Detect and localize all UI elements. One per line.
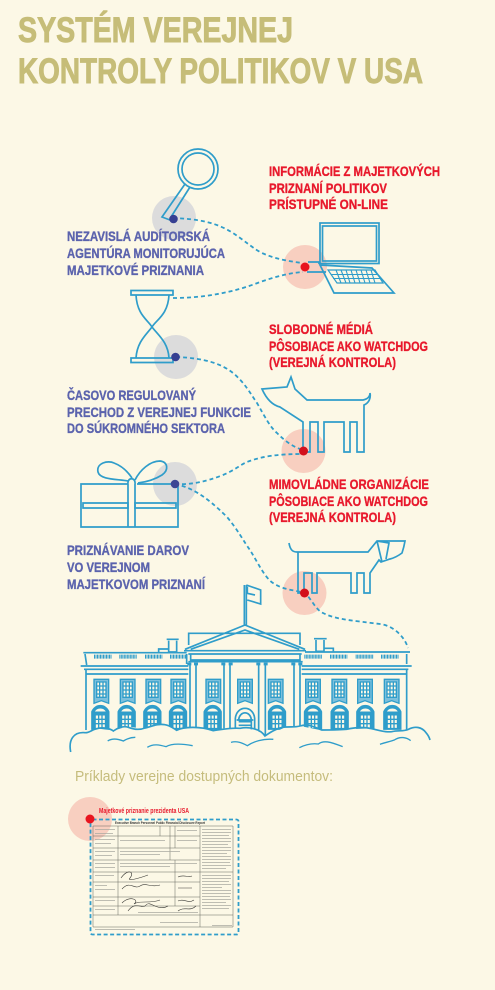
central door bbox=[235, 708, 255, 729]
text: regulated transition: ČASOVO REGULOVANÝ bbox=[67, 386, 197, 403]
icon: laptop bbox=[307, 223, 394, 293]
icon: hourglass bbox=[131, 290, 173, 362]
lower windows bbox=[92, 705, 109, 729]
clouds bbox=[70, 724, 430, 753]
icon: first dog bbox=[262, 377, 370, 452]
node: hourglass bbox=[171, 353, 180, 361]
text: declaring gifts: PRIZNÁVANIE DAROV bbox=[67, 542, 190, 558]
text: non-governmental organisations bbox=[269, 476, 429, 525]
text: regulated transition: PRECHOD Z VEREJNEJ FUNKCIE bbox=[67, 404, 251, 420]
left wing roof and balustrade bbox=[81, 653, 188, 730]
text: red on-line declarations: PRIZNANÍ POLITIKOV bbox=[269, 180, 388, 196]
text: free media: (VEREJNÁ KONTROLA) bbox=[269, 354, 396, 370]
text: non-governmental organisations: PÔSOBIACE AKO WATCHDOG bbox=[269, 492, 428, 509]
text: independent audit agency bbox=[67, 228, 225, 278]
connector: hourglass to laptop bbox=[173, 272, 303, 298]
right wing roof and balustrade bbox=[302, 652, 412, 730]
node: gift bbox=[171, 480, 179, 488]
node: first dog bbox=[299, 446, 308, 456]
connector: gift to first dog bbox=[175, 454, 302, 484]
connector: hourglass to first dog bbox=[176, 357, 300, 449]
icon: gift box bbox=[81, 461, 178, 527]
upper windows bbox=[94, 679, 109, 703]
caption: examples of documents: Príklady verejne dostupných dokumentov: bbox=[75, 769, 333, 785]
text: declaring gifts: VO VEREJNOM bbox=[67, 559, 150, 575]
text: free media: PÔSOBIACE AKO WATCHDOG bbox=[269, 337, 428, 354]
columns bbox=[190, 663, 300, 735]
text: free media bbox=[269, 321, 428, 370]
document example bbox=[68, 797, 238, 934]
column capitals bbox=[187, 660, 302, 668]
form header: Executive Branch Personnel Public Financial Disclosure Report bbox=[115, 821, 206, 825]
form fine print bbox=[95, 829, 232, 930]
text: free media: SLOBODNÉ MÉDIÁ bbox=[269, 321, 373, 337]
text: independent audit agency: AGENTÚRA MONITORUJÚCA bbox=[67, 244, 225, 261]
signatures bbox=[121, 872, 196, 911]
text: regulated transition bbox=[67, 386, 251, 436]
node: laptop bbox=[300, 262, 310, 272]
text: declaring gifts bbox=[67, 542, 206, 592]
illustration: White House bbox=[70, 585, 430, 753]
halo: second dog node bbox=[282, 571, 326, 615]
text: independent audit agency: NEZAVISLÁ AUDÍTORSKÁ bbox=[67, 228, 210, 244]
text: non-governmental organisations: (VEREJNÁ KONTROLA) bbox=[269, 509, 396, 525]
text: red on-line declarations: PRÍSTUPNÉ ON-LINE bbox=[269, 196, 388, 212]
title bbox=[18, 10, 423, 91]
halo: hourglass node bbox=[154, 335, 198, 379]
document node bbox=[86, 814, 94, 824]
halo: magnifier node bbox=[152, 196, 196, 240]
connector: magnifier to laptop bbox=[173, 218, 302, 263]
portico entablature bbox=[188, 654, 303, 662]
title: SYSTÉM VEREJNEJ bbox=[18, 10, 293, 50]
text: independent audit agency: MAJETKOVÉ PRIZNANIA bbox=[67, 262, 204, 278]
halo: gift node bbox=[153, 462, 197, 506]
node: magnifier bbox=[169, 215, 178, 223]
document label: Majetkové priznanie prezidenta USA bbox=[99, 806, 189, 815]
text: red on-line declarations: INFORMÁCIE Z MAJETKOVÝCH bbox=[269, 162, 440, 179]
icon: second dog bbox=[289, 541, 405, 593]
halo: first dog node bbox=[282, 429, 326, 473]
chimneys bbox=[159, 639, 179, 652]
halo: laptop node bbox=[283, 245, 327, 289]
flag bbox=[244, 585, 261, 625]
text: regulated transition: DO SÚKROMNÉHO SEKTORA bbox=[67, 419, 225, 436]
dashed document border bbox=[90, 820, 238, 934]
form grid bbox=[93, 826, 233, 927]
node: second dog bbox=[300, 588, 309, 598]
icon: magnifying glass bbox=[162, 149, 218, 220]
text: declaring gifts: MAJETKOVOM PRIZNANÍ bbox=[67, 576, 206, 592]
connector: gift to second dog and White House bbox=[175, 484, 408, 648]
pediment bbox=[184, 625, 306, 651]
text: red on-line declarations bbox=[269, 162, 440, 212]
text: non-governmental organisations: MIMOVLÁDNE ORGANIZÁCIE bbox=[269, 476, 429, 492]
document halo bbox=[68, 797, 112, 841]
